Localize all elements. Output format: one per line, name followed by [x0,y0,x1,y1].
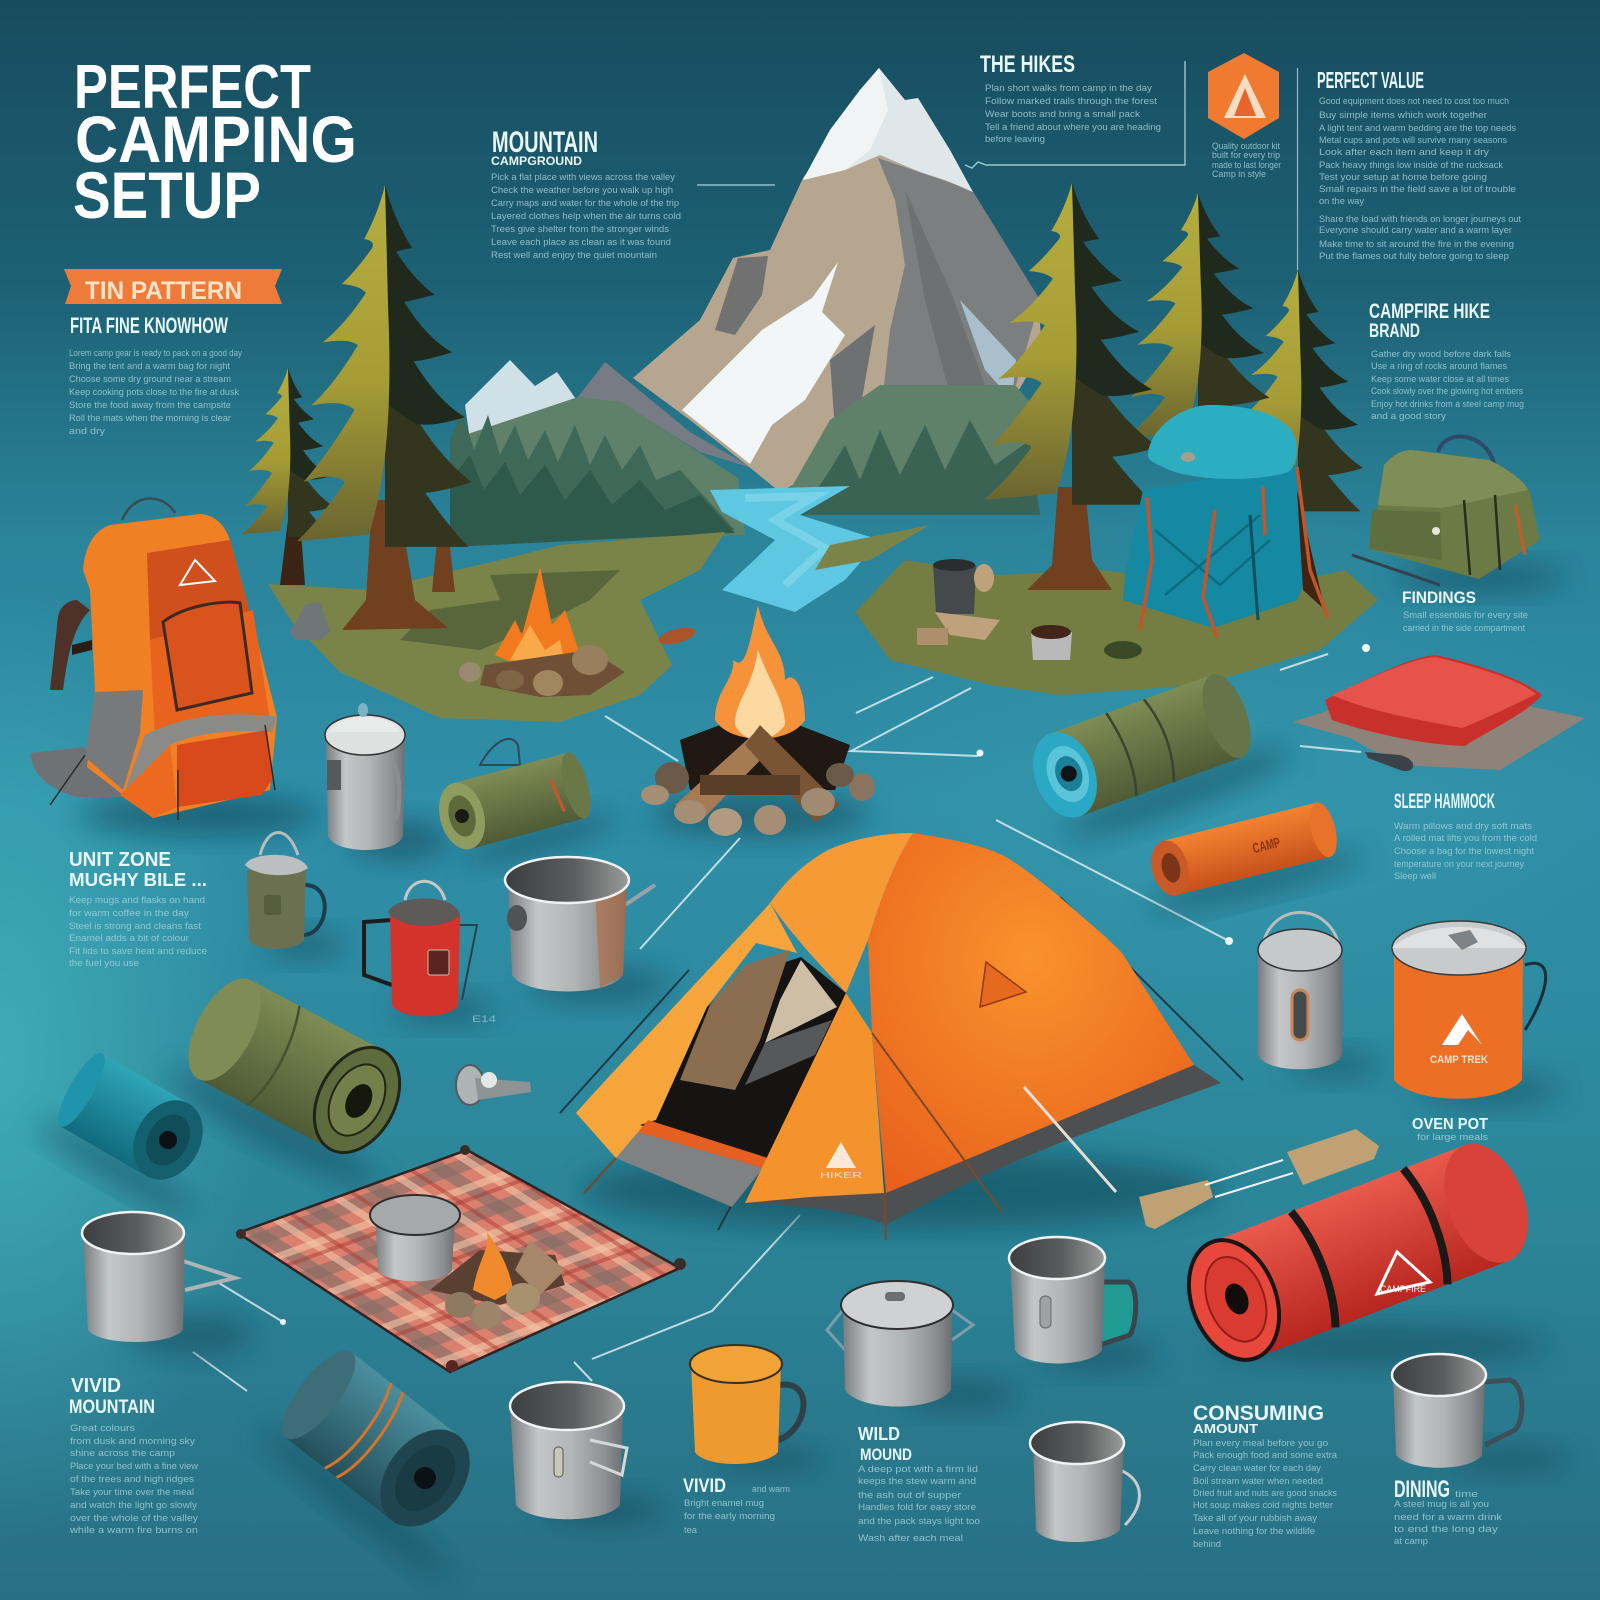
text block: perfect value: Everyone should carry water and a warm layer [1319,225,1512,235]
right ground props [917,559,1142,660]
text block: mountain: Carry maps and water for the whole of the trip [491,198,679,208]
text block: consuming: behind [1193,1539,1221,1549]
text block: consuming: Dried fruit and nuts are good snacks [1193,1488,1337,1498]
black straps [1291,1165,1457,1327]
text block: unit zone: Keep mugs and flasks on hand [69,895,205,905]
small snowy peak [465,360,578,440]
text block: findings: carried in the side compartment [1403,623,1525,633]
orange pot right: CAMP TREK [1430,1054,1488,1066]
lower pocket [177,730,273,807]
text block: sleep hammock: temperature on your next journey [1394,859,1524,869]
big left tree [297,185,471,547]
rocks [655,762,689,794]
small trowel [1365,752,1413,771]
dark teal roll [251,1337,521,1589]
top dark section [147,540,253,650]
hip belt [125,714,277,790]
text block: vivid small: VIVID [683,1476,726,1497]
backpack shadow [80,795,320,835]
right front panel [745,993,884,1203]
text block: wild mound: Handles fold for easy store [858,1502,976,1512]
olive mug with lid [245,832,345,959]
door grey wall [745,1020,832,1085]
silver kettle [325,703,450,860]
logo [180,560,215,585]
right tree 2 [1125,193,1269,442]
guy lines [560,897,1243,1230]
text block: mountain: Check the weather before you walk up high [491,185,673,195]
text block: vivid small [683,1476,790,1535]
red body [1212,1145,1508,1358]
text block: left top: FITA FINE KNOWHOW [70,313,228,338]
text block: dining: A steel mug is all you [1394,1499,1489,1509]
title: PERFECT [74,53,311,122]
triangle logo on fabric [980,962,1026,1007]
text block: campfire hike: CAMPFIRE HIKE [1369,300,1490,323]
right side strip [150,610,270,740]
olive duffel bag [1352,436,1565,592]
text block: vivid small: tea [684,1525,697,1535]
top left panel [770,833,913,993]
big left tree trunk [342,500,448,630]
text block: perfect value: Small repairs in the field save a lot of trouble [1319,184,1516,194]
red sleeping bag [1173,1132,1550,1373]
backpack creases [1155,515,1270,595]
tent: HIKER [820,1171,862,1180]
text block: dining: DINING [1394,1476,1450,1503]
tan rocks [935,612,1000,640]
text block: perfect value: Good equipment does not need to cost too much [1319,96,1509,106]
text block: consuming: Leave nothing for the wildlife [1193,1526,1315,1536]
text block: unit zone: the fuel you use [69,958,139,968]
text block: consuming: Take all of your rubbish away [1193,1513,1318,1523]
text block: oven pot: for large meals [1417,1132,1489,1142]
text block: consuming: Boil stream water when needed [1193,1476,1323,1486]
spiral end [1173,1227,1295,1373]
olive roll with blue end [1022,658,1297,854]
distant mountains and forest [450,360,752,547]
text block: vivid small: Bright enamel mug [684,1498,764,1508]
gray cooking pot [505,857,670,1003]
text block: perfect value: Put the flames out fully before going to sleep [1319,251,1509,261]
door trim orange [638,1120,768,1168]
teal backpack [1123,405,1328,637]
text block: campfire hike: Keep some water close at all times [1371,374,1509,384]
front pocket [163,602,252,710]
small tent icon [480,739,520,765]
text block: perfect value: Make time to sit around the fire in the evening [1319,239,1514,249]
text block: campfire hike: BRAND [1369,321,1420,342]
right dark panel [1297,490,1325,610]
small left tree trunk [280,520,305,585]
text block: left top: Roll the mats when the morning is clear [69,413,231,423]
flames [715,605,805,739]
text block: left top: Keep cooking pots close to the fire at dusk [69,387,239,397]
white stake [1024,1087,1116,1192]
lower left flap [120,745,177,818]
text block: perfect value: Buy simple items which work together [1319,110,1487,120]
right tree 1 [984,183,1158,505]
callout dots [280,644,1370,1325]
text block: vivid mountain: of the trees and high ridges [70,1474,195,1484]
red bag logo [1377,1252,1430,1294]
text block: consuming: Pack enough food and some extra [1193,1450,1337,1460]
text block: dining [1394,1476,1503,1546]
text block: badge caption [1212,141,1281,179]
olive sleeping bag [159,966,436,1201]
grey rock face [878,158,1040,422]
text block: mountain: Trees give shelter from the stronger winds [491,224,670,234]
right tree 1 trunk [1027,487,1112,590]
text block: mountain: Layered clothes help when the air turns cold [491,211,681,221]
small left tree [242,368,333,537]
grey side peak [578,362,752,468]
text block: perfect value: on the way [1319,196,1365,206]
dark firewood [680,710,850,790]
text block: the hikes [980,51,1161,144]
tiny flashlight [456,1065,531,1105]
pot on blanket [375,1215,455,1281]
blanket rocks [506,1283,540,1313]
title: CAMPING [75,102,357,176]
tent [560,833,1243,1240]
left ground patch [268,532,725,722]
text block: campfire hike: Cook slowly over the glowing hot embers [1371,386,1523,396]
door opening [640,957,846,1163]
text block: vivid mountain: from dusk and morning sky [70,1436,196,1446]
text block: left top: and dry [69,426,106,436]
orange backpack [30,498,320,835]
grey rock [290,602,330,640]
text block: vivid mountain: while a warm fire burns on [69,1525,198,1535]
dark cup [933,565,976,614]
text block: vivid mountain: Take your time over the meal [70,1487,194,1497]
text block: consuming: AMOUNT [1193,1421,1258,1436]
text block: perfect value: Metal cups and pots will survive many seasons [1319,135,1507,145]
text block: dining: need for a warm drink [1394,1512,1503,1522]
silver kettle right [1258,912,1380,1079]
text block: vivid mountain [69,1375,199,1535]
title [73,53,357,232]
callout lines [193,654,1361,1391]
text block: wild mound: A deep pot with a firm lid [858,1464,978,1474]
orange small roll [1134,795,1366,922]
text block: the hikes: Wear boots and bring a small pack [985,109,1141,119]
text block: wild mound: WILD [858,1424,900,1444]
text block: consuming [1193,1402,1337,1549]
small olive roll [432,744,621,876]
center campfire [641,605,875,837]
text block: mountain [491,126,681,260]
text block: perfect value: A light tent and warm bedding are the top needs [1319,123,1517,133]
backpack straps [1140,467,1328,637]
text block: wild mound: and the pack stays light too [858,1516,980,1526]
text block: mountain: CAMPGROUND [491,154,582,168]
text block: consuming: CONSUMING [1193,1402,1324,1425]
text block: vivid mountain: Place your bed with a fine view [70,1461,199,1471]
grey side panel [85,690,143,790]
text block: the hikes: Plan short walks from camp in the day [985,83,1153,93]
text block: perfect value: Test your setup at home before going [1319,172,1487,182]
blanket flame [473,1232,513,1300]
orange mug [690,1345,825,1474]
text block: left top: Lorem camp gear is ready to pack on a good day [69,348,242,358]
pot with lid [827,1281,1020,1411]
text block: campfire hike: and a good story [1371,411,1447,421]
right ground patch [815,525,1378,695]
blanket corners [236,1229,246,1239]
text block: dining: at camp [1394,1536,1428,1546]
crossed logs [675,728,775,822]
big mountain [633,68,1045,515]
blanket fire logs [430,1250,565,1305]
side bag [30,747,125,797]
connector line: mountain [697,184,775,186]
text block: campfire hike [1369,300,1524,421]
text block: sleep hammock: Sleep well [1394,871,1436,881]
orange strap [325,1383,410,1483]
text block: mountain: Leave each place as clean as it was found [491,237,671,247]
shield badge [1208,53,1279,139]
right main face [868,833,1194,1193]
text block: unit zone: MUGHY BILE ... [69,870,207,890]
text block: wild mound [858,1424,980,1543]
text block: consuming: Plan every meal before you go [1193,1438,1328,1448]
dark spot [1104,641,1142,659]
small cup [1031,632,1072,660]
red sleeping bag: CAMPFIRE [1380,1284,1426,1294]
silver cup left [82,1212,255,1355]
ribbon banner: TIN PATTERN [85,277,242,305]
text block: vivid small: and warm [752,1484,790,1494]
text block: left top: Store the food away from the campsite [69,400,231,410]
text block: findings: Small essentials for every site [1403,610,1528,620]
door brown interior [680,950,790,1090]
teal roll [32,1044,241,1225]
red pillow on mat [1293,655,1585,771]
text block: left top: Bring the tent and a warm bag for night [69,361,231,371]
text block: mountain: MOUNTAIN [492,126,598,159]
text block: left top: Choose some dry ground near a stream [69,374,231,384]
text block: perfect value: Pack heavy things low inside of the rucksack [1319,160,1504,170]
backpack body [1123,465,1303,628]
text block: dining: time [1455,1489,1478,1499]
text block: left top [69,313,242,436]
backpack dome [1148,405,1297,479]
text block: findings: FINDINGS [1402,588,1476,607]
text block: perfect value: Look after each item and keep it dry [1319,147,1490,157]
small logo marks on ground: E14 [472,1014,496,1024]
text block: findings [1402,588,1528,633]
text block: wild mound: the ash out of supper [858,1490,961,1500]
text block: unit zone [69,849,207,968]
text block: oven pot [1412,1116,1489,1142]
text block: unit zone: Fit lids to save heat and reduce [69,946,207,956]
text block: badge caption: built for every trip [1212,150,1280,160]
ribbon banner [64,269,282,305]
door tan window [765,960,837,1043]
grey outer skirt [745,1065,1221,1225]
straps and cords [50,725,275,820]
text block: campfire hike: Enjoy hot drinks from a steel camp mug [1371,399,1524,409]
text block: campfire hike: Use a ring of rocks around flames [1371,361,1508,371]
text block: dining: to end the long day [1394,1524,1499,1534]
text block: vivid small: for the early morning [684,1511,775,1521]
front logo [826,1142,856,1168]
text block: vivid mountain: Great colours [70,1423,136,1433]
snow cap [803,68,973,192]
text block: mountain: Pick a flat place with views across the valley [491,172,676,182]
pillow [1325,655,1542,746]
text block: mountain: Rest well and enjoy the quiet mountain [491,250,657,260]
text block: wild mound: MOUND [860,1445,912,1464]
wooden stakes [1139,1129,1379,1229]
text block: vivid mountain: MOUNTAIN [69,1397,155,1418]
text block: vivid mountain: and watch the light go slowly [70,1500,198,1510]
text block: badge caption: Camp in style [1212,169,1266,179]
text block: wild mound: keeps the stew warm and [858,1476,976,1486]
text block: consuming: Carry clean water for each day [1193,1463,1322,1473]
text block: vivid mountain: VIVID [71,1375,121,1397]
text block: wild mound: Wash after each meal [858,1533,963,1543]
left campfire [459,567,625,697]
mug bottom [1030,1422,1139,1542]
text block: unit zone: Enamel adds a bit of colour [69,933,189,943]
text block: the hikes: THE HIKES [980,51,1075,78]
trees [242,183,1363,630]
poles [584,1033,1002,1240]
callout frame: the hikes [965,61,1185,168]
text block: perfect value [1317,67,1522,261]
text block: perfect value: Share the load with friends on longer journeys out [1319,214,1522,224]
green hillside [450,397,745,545]
text block: campfire hike: Gather dry wood before dark falls [1371,349,1512,359]
text block: unit zone: Steel is strong and cleans fast [69,921,202,931]
text block: perfect value: PERFECT VALUE [1317,67,1424,93]
title: SETUP [73,158,261,232]
grey door skirt [616,1132,763,1207]
conifer forest silhouettes [450,410,735,545]
text block: badge caption: made to last longer [1212,160,1281,170]
text block: the hikes: Tell a friend about where you are heading [985,122,1161,132]
text block: the hikes: before leaving [985,134,1045,144]
main body [83,514,277,818]
text block: the hikes: Follow marked trails through the forest [985,96,1158,106]
small log [657,624,697,648]
text block: sleep hammock: A rolled mat lifts you from the cold [1394,833,1537,843]
handle strap [1280,1195,1440,1235]
snow streak [682,262,845,464]
right tree 3 [1232,270,1363,511]
text block: sleep hammock [1394,790,1537,881]
top handle [122,498,175,520]
text block: sleep hammock: Warm pillows and dry soft mats [1394,821,1533,831]
left front fly [576,903,797,1158]
orange small roll: CAMP [1251,834,1282,856]
river [710,486,880,612]
grey mat [1293,700,1585,770]
left strap [50,600,90,690]
text block: sleep hammock: SLEEP HAMMOCK [1394,790,1495,813]
text block: unit zone: for warm coffee in the day [69,908,190,918]
right green slope [790,385,1045,515]
mug right [1392,1354,1570,1474]
red bottle [364,881,495,1024]
text block: vivid mountain: over the whole of the valley [70,1513,199,1523]
left ground props [290,602,697,648]
plaid blanket [236,1145,686,1372]
text block: vivid mountain: shine across the camp [70,1448,175,1458]
text block: oven pot: OVEN POT [1412,1116,1488,1133]
divider line [1296,68,1298,270]
text block: consuming: Hot soup makes cold nights better [1193,1500,1333,1510]
tan rock face [633,68,1042,492]
text block: sleep hammock: Choose a bag for the lowest night [1394,846,1535,856]
silver pot bottom [510,1382,665,1526]
tent shadow [580,1150,1220,1230]
mug center [1009,1237,1160,1371]
text block: badge caption: Quality outdoor kit [1212,141,1280,151]
orange pot right [1392,921,1560,1106]
text block: unit zone: UNIT ZONE [69,849,171,871]
